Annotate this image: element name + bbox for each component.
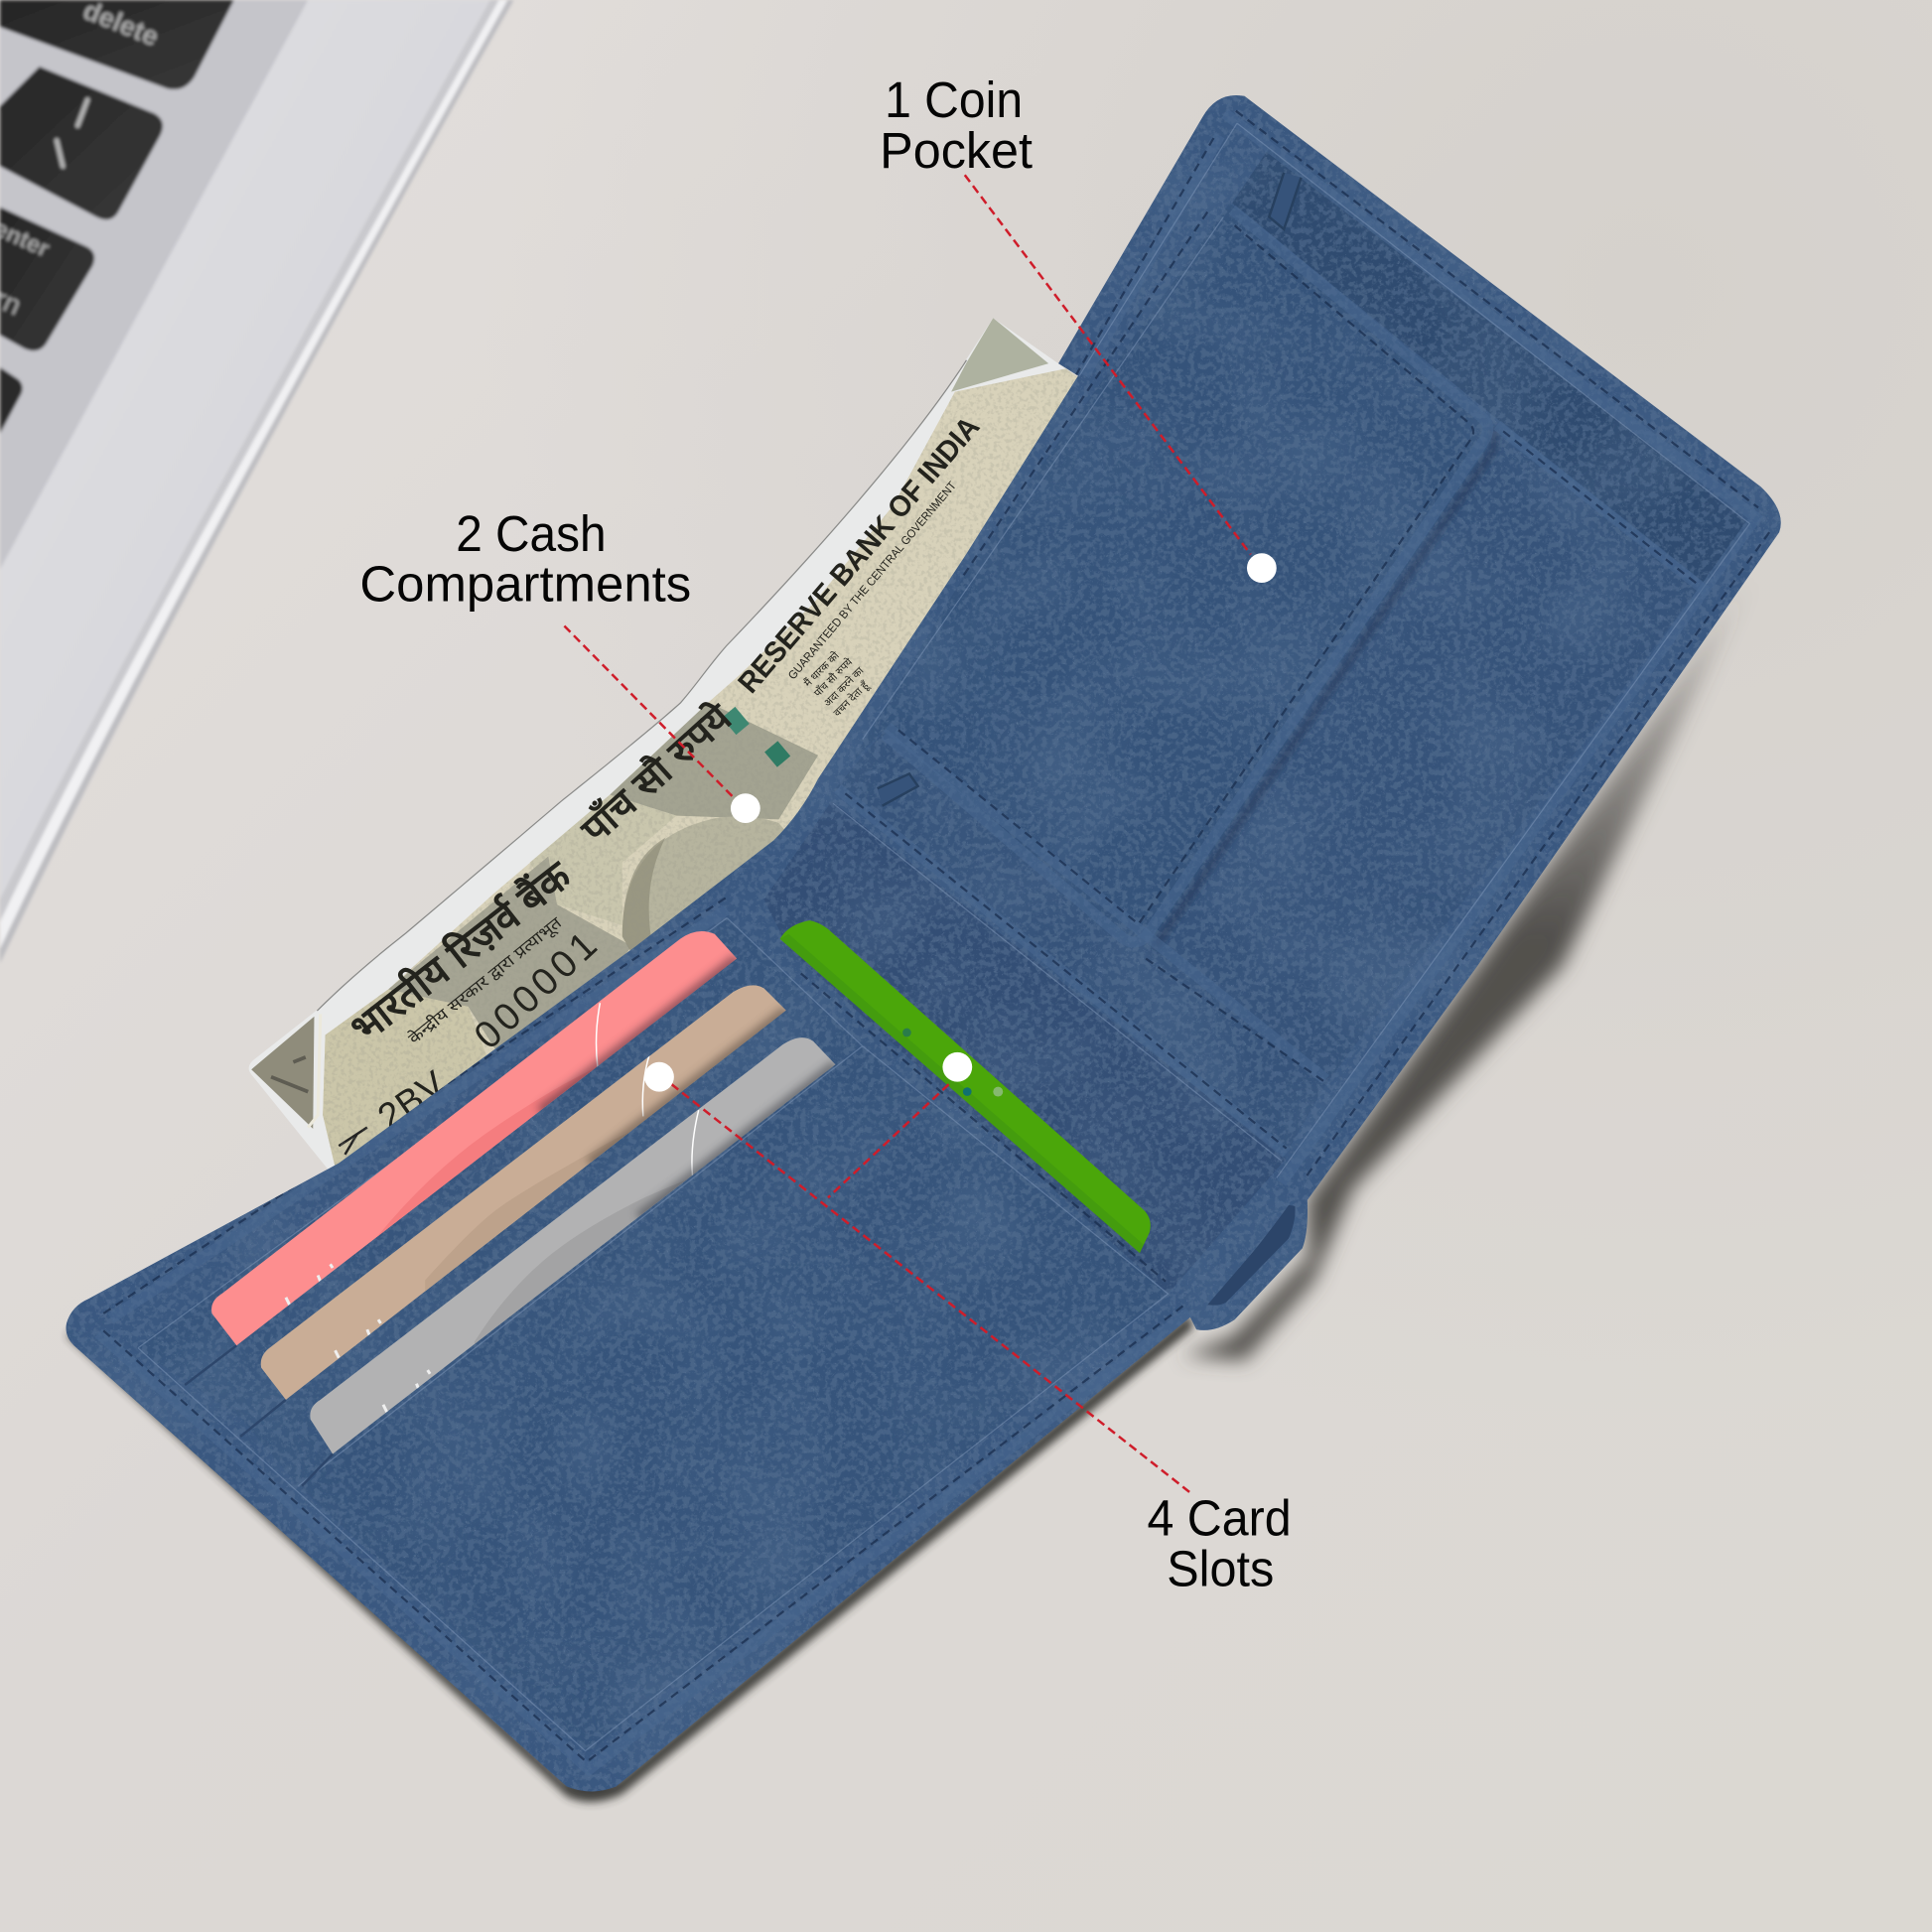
label: 2 Cash Compartments [359, 505, 691, 613]
green security marks [722, 707, 750, 735]
label: 1 Coin Pocket: Pocket [880, 122, 1033, 179]
note dome shading [622, 838, 665, 961]
note corner pattern top [951, 318, 1048, 392]
laptop corner with keys [0, 0, 514, 964]
banknote: पाँच सौ रुपये [572, 694, 741, 853]
banknote: 2BV [370, 1062, 453, 1138]
upper strap band [1232, 123, 1749, 586]
key: delete [0, 0, 234, 89]
card: pink [198, 911, 752, 1355]
card: grey [296, 1023, 850, 1466]
note corner pattern bottom [251, 1017, 314, 1129]
card slot panel [136, 918, 863, 1486]
note ivory patch [530, 794, 676, 925]
banknote [240, 308, 1090, 1195]
note text: RESERVE BANK OF INDIA [732, 411, 986, 700]
label: 1 Coin Pocket: 1 Coin [885, 71, 1023, 128]
label: 1 Coin Pocket [880, 71, 1033, 179]
fold panel [763, 801, 1287, 1294]
slot notches [878, 173, 1302, 806]
key: backslash [0, 67, 163, 219]
strap ridge [1497, 425, 1707, 592]
lower right panel [1140, 434, 1698, 1084]
banknote: मैं धारक को [801, 649, 842, 690]
front pocket [298, 1046, 1169, 1752]
banknote: GUARANTEED BY THE CENTRAL GOVERNMENT [786, 480, 959, 682]
stitch along green card [801, 973, 1166, 1282]
label: 2 Cash Compartments: 2 Cash [456, 505, 607, 562]
flap drop shadow [1155, 429, 1494, 947]
card: tan [246, 973, 801, 1417]
note grey band upper [610, 702, 818, 819]
flap lobe crescent [1207, 1205, 1296, 1306]
coin pocket flap [850, 204, 1491, 946]
label: 4 Card Slots: Slots [1167, 1540, 1274, 1596]
seams and stitching [98, 111, 1769, 1769]
flap edging [863, 209, 1488, 942]
callout: coin pocket leader [965, 175, 1277, 583]
banknote: 000001 [467, 924, 606, 1057]
wallet body [67, 95, 1781, 1792]
note paper texture [324, 369, 1077, 1166]
note printed field [323, 364, 1084, 1182]
pocket edges [185, 1345, 333, 1486]
label: 2 Cash Compartments: Compartments [359, 556, 691, 613]
note ivory lower [323, 989, 486, 1166]
banknote: वचन देता हूँ [831, 678, 873, 720]
ridge panel [835, 727, 1325, 1154]
label: 4 Card Slots [1147, 1489, 1292, 1596]
card: green [780, 920, 1151, 1253]
banknote: अदा करने का [821, 664, 867, 709]
leather grain [68, 95, 1781, 1791]
note grey band lower [388, 856, 629, 1048]
banknote: केन्द्रीय सरकार द्वारा प्रत्याभूत [405, 912, 566, 1048]
banknote: पाँच सौ रुपये [811, 655, 856, 700]
callout: cash leader [564, 625, 760, 823]
fold ridges [833, 727, 1328, 1161]
wallet shadow [67, 579, 1749, 1802]
callout: card slots leaders [644, 1052, 1192, 1494]
banknote: भारतीय रिज़र्व बैंक [342, 851, 580, 1052]
label: 4 Card Slots: 4 Card [1147, 1489, 1292, 1546]
note stone dome [621, 816, 784, 949]
key: enter [0, 207, 94, 350]
card slots [198, 911, 1151, 1466]
key: partial [0, 367, 23, 434]
